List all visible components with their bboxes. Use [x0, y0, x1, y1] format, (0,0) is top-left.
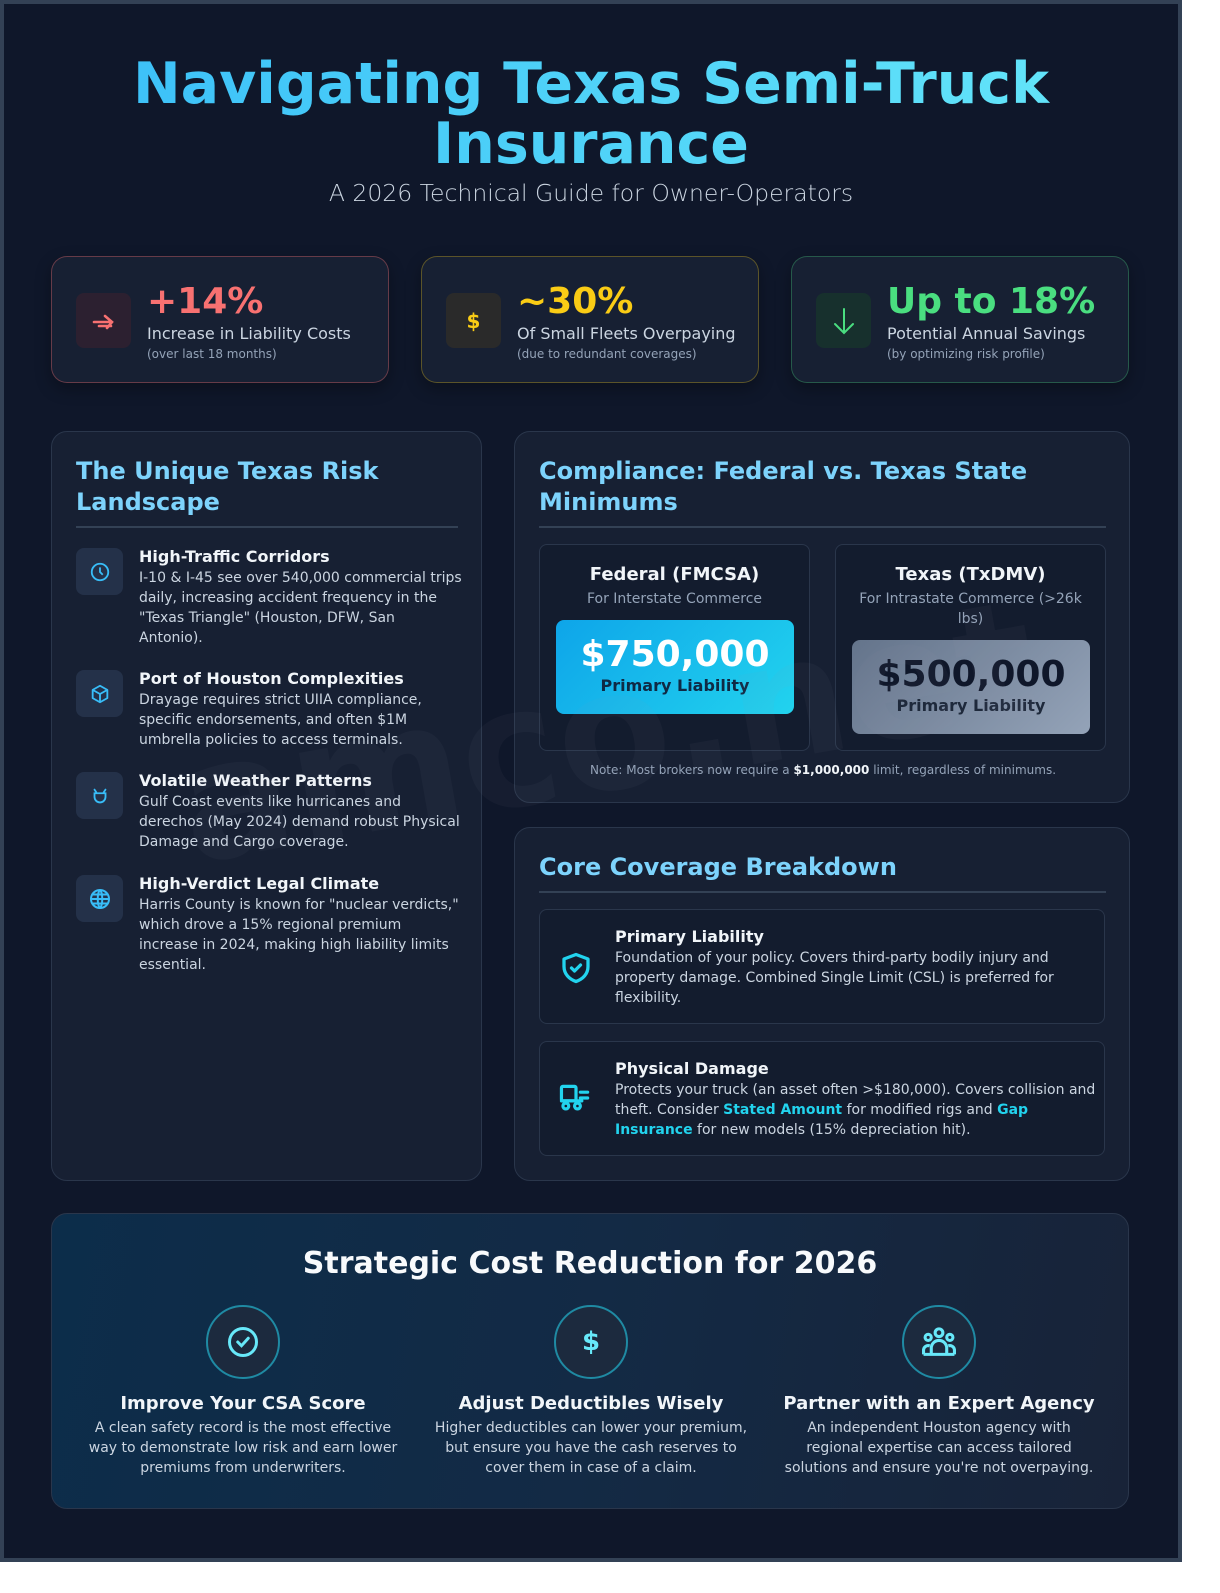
title: Navigating Texas Semi-Truck — [133, 51, 1049, 117]
icon: dollar balance — [554, 1305, 628, 1379]
icon: down arrow — [816, 293, 871, 348]
icon: trend arrow — [76, 293, 131, 348]
column: CSA: A clean safety record is the most effective way to demonstrate low risk and earn lower premiums from underwriters. — [89, 1420, 397, 1476]
amount: federal — [556, 620, 794, 714]
federal box — [539, 544, 810, 751]
panel: Texas risk landscape: I-10 & I-45 see over 540,000 commercial trips daily, increasing accident frequency in the "Texas Triangle" (Houston, DFW, San — [139, 570, 462, 626]
panel: Texas risk landscape — [51, 431, 482, 1181]
texas box — [835, 544, 1106, 751]
column: deductibles: Adjust Deductibles Wisely — [459, 1393, 723, 1414]
stat card: savings: Potential Annual Savings — [887, 324, 1085, 343]
panel: Texas risk landscape: Port of Houston Complexities — [139, 669, 404, 688]
panel: Texas risk landscape: Volatile Weather Patterns — [139, 771, 372, 790]
heading — [539, 852, 1106, 893]
stat card: savings: (by optimizing risk profile) — [887, 347, 1045, 361]
panel: strategic cost reduction — [51, 1213, 1129, 1509]
heading: Compliance: Federal vs. Texas State Minimums — [539, 457, 1027, 516]
texas box: For Intrastate Commerce (>26k lbs) — [859, 591, 1082, 627]
panel: Texas risk landscape: Drayage requires strict UIIA compliance, specific endorsements, and often $1M umbrella policies to access terminals. — [139, 692, 422, 748]
item: corridors — [76, 547, 462, 646]
heading: Strategic Cost Reduction for 2026 — [303, 1246, 877, 1281]
column: agency: Partner with an Expert Agency — [783, 1393, 1095, 1414]
icon: dollar: $ — [467, 308, 480, 332]
column: deductibles: Higher deductibles can lower your premium, but ensure you have the cash reserves to cover them in case of a claim. — [435, 1420, 747, 1476]
amount: texas: $500,000 — [876, 654, 1066, 695]
federal box: Federal (FMCSA) — [590, 564, 759, 585]
federal box: For Interstate Commerce — [587, 591, 762, 607]
icon: dollar balance: $ — [582, 1327, 600, 1357]
item: legal — [76, 874, 459, 973]
panel: Texas risk landscape: High-Traffic Corridors — [139, 547, 330, 566]
panel: core coverage — [514, 827, 1130, 1181]
amount: federal: Primary Liability — [601, 676, 749, 695]
icon: dollar — [446, 293, 501, 348]
note: Note: Most brokers now require a $1,000,000 limit, regardless of minimums. — [590, 763, 1056, 777]
amount: federal: $750,000 — [580, 634, 770, 675]
subtitle: A 2026 Technical Guide for Owner-Operators — [329, 179, 853, 207]
column: agency — [783, 1305, 1095, 1476]
panel: Texas risk landscape: High-Verdict Legal Climate — [139, 874, 379, 893]
stat card: savings: Up to 18% — [887, 281, 1095, 322]
icon: people — [902, 1305, 976, 1379]
amount: texas: Primary Liability — [897, 696, 1045, 715]
stat card: overpaying: Of Small Fleets Overpaying — [517, 324, 736, 343]
card: primary liability — [539, 909, 1105, 1024]
heading: Core Coverage Breakdown — [539, 853, 897, 881]
card: physical damage: Physical Damage — [615, 1059, 769, 1078]
heading — [76, 456, 458, 528]
panel: Texas risk landscape: increase in 2024, making high liability limits — [139, 937, 449, 953]
stat card: liability costs — [51, 256, 389, 383]
card: primary liability: Foundation of your policy. Covers third-party bodily injury and property damage. Combined Single Limit (CSL) is preferred for flexibility. — [615, 950, 1054, 1006]
title: Insurance — [433, 111, 749, 177]
item: port — [76, 669, 422, 748]
stat card: overpaying: (due to redundant coverages) — [517, 347, 697, 361]
heading: The Unique Texas Risk Landscape — [76, 457, 379, 516]
card: physical damage — [539, 1041, 1105, 1156]
text: amco.net — [165, 562, 1050, 902]
column: CSA — [89, 1305, 398, 1476]
panel: compliance — [514, 431, 1130, 803]
column: CSA: Improve Your CSA Score — [120, 1393, 366, 1414]
item: weather — [76, 771, 460, 850]
column: agency: An independent Houston agency with regional expertise can access tailored solutions and ensure you're not overpaying. — [785, 1420, 1093, 1476]
card: primary liability: Primary Liability — [615, 927, 764, 946]
stat card: liability costs: (over last 18 months) — [147, 347, 277, 361]
stat card: liability costs: +14% — [147, 281, 263, 322]
card: physical damage: Protects your truck (an asset often >$180,000). Covers collision and theft. Consider Stated Amount for modified rigs and Gap Insurance for new models (15% depreciation hit). — [615, 1082, 1095, 1138]
panel: Texas risk landscape: Antonio). — [139, 630, 203, 646]
texas box: Texas (TxDMV) — [896, 564, 1045, 585]
title — [4, 54, 1178, 174]
stat card: liability costs: Increase in Liability Costs — [147, 324, 351, 343]
panel: Texas risk landscape: essential. — [139, 957, 206, 973]
stat card: savings — [791, 256, 1129, 383]
panel: Texas risk landscape: Harris County is known for "nuclear verdicts," which drove a 15% regional premium — [139, 897, 459, 933]
icon: check circle — [206, 1305, 280, 1379]
panel: Texas risk landscape: Gulf Coast events like hurricanes and derechos (May 2024) demand robust Physical Damage and Cargo coverage. — [139, 794, 460, 850]
amount: texas — [852, 640, 1090, 734]
column: deductibles — [435, 1305, 747, 1476]
stat card: overpaying: ~30% — [517, 281, 633, 322]
stat card: overpaying — [421, 256, 759, 383]
